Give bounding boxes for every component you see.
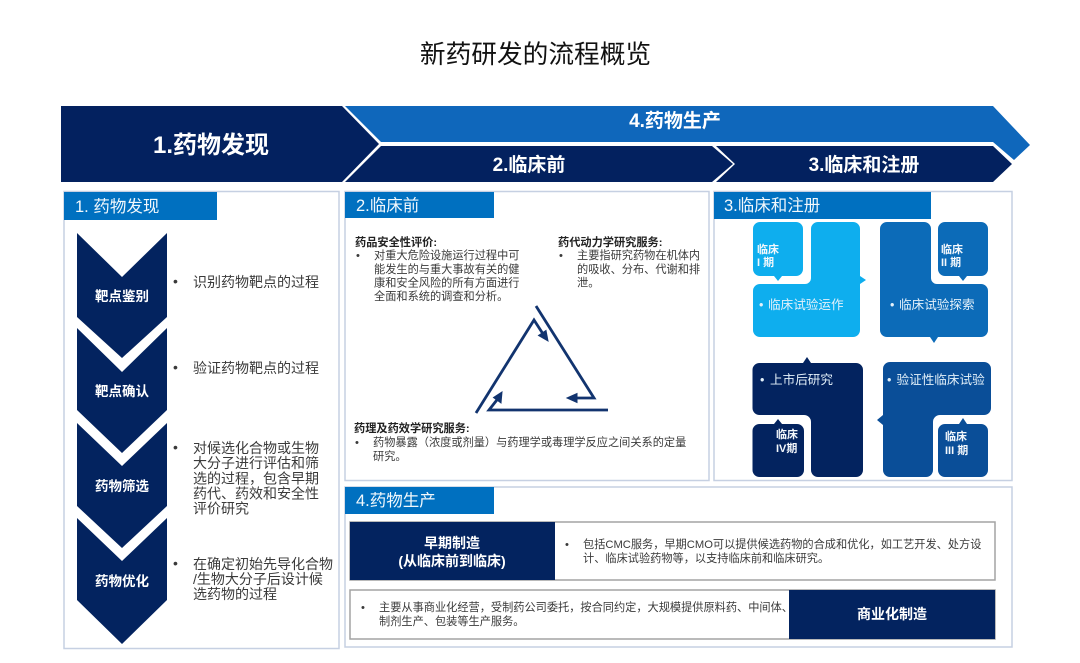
panel: 临床前 bbox=[345, 192, 709, 480]
text: 药品安全性评价: 药品安全性评价: bbox=[355, 235, 437, 249]
banner: process chevrons bbox=[61, 106, 1030, 182]
step: 靶点鉴别: 识别药物靶点的过程 bbox=[193, 274, 319, 290]
chevron: 3.临床和注册 bbox=[716, 146, 1012, 182]
panel heading bbox=[345, 487, 494, 514]
chevron: 4.药物生产 bbox=[345, 106, 1030, 160]
text: 药品安全性评价: 全面和系统的调查和分析。 bbox=[374, 289, 508, 303]
row: 早期制造 bbox=[350, 522, 995, 580]
step: 靶点确认: • bbox=[173, 359, 178, 375]
step: 靶点鉴别: 靶点鉴别 bbox=[95, 288, 149, 304]
block: 上市后研究: 临床 bbox=[776, 427, 798, 441]
step: 药物筛选: 对候选化合物或生物 bbox=[193, 440, 319, 456]
block: 临床试验探索: II 期 bbox=[941, 255, 961, 269]
panel heading: 4.药物生产 bbox=[356, 491, 436, 510]
step: 药物筛选: • bbox=[173, 439, 178, 455]
text: 药代动力学研究服务: 泄。 bbox=[577, 276, 599, 290]
panel heading: 2.临床前 bbox=[356, 196, 419, 215]
text: 药品安全性评价 bbox=[355, 235, 519, 303]
block: 临床试验探索: 临床 bbox=[941, 242, 963, 256]
block: 验证性临床试验: 验证性临床试验 bbox=[896, 372, 985, 387]
block: 临床试验运作: I 期 bbox=[757, 255, 774, 269]
panel heading: 1. 药物发现 bbox=[75, 197, 159, 216]
step: 靶点确认: 验证药物靶点的过程 bbox=[193, 360, 319, 376]
block: 临床试验探索: • bbox=[890, 298, 894, 312]
step: 药物优化 bbox=[77, 518, 333, 644]
step: 药物优化: • bbox=[173, 555, 178, 571]
panel heading: 3.临床和注册 bbox=[724, 196, 820, 215]
block: 临床试验运作 bbox=[753, 222, 866, 337]
panel heading bbox=[714, 192, 931, 219]
step: 药物优化: 药物优化 bbox=[95, 573, 149, 589]
block: 临床试验运作: • bbox=[759, 298, 763, 312]
block: 上市后研究: IV期 bbox=[776, 441, 797, 455]
block: 上市后研究 bbox=[752, 357, 863, 477]
text: 药理及药效学研究服务: 药物暴露（浓度或剂量）与药理学或毒理学反应之间关系的定量 bbox=[373, 435, 686, 449]
block: 上市后研究: • bbox=[760, 373, 764, 387]
block: 临床试验探索 bbox=[880, 222, 988, 343]
text: 药代动力学研究服务: 药代动力学研究服务: bbox=[558, 235, 662, 249]
block: 验证性临床试验 bbox=[877, 362, 991, 477]
title: 新药研发的流程概览 bbox=[420, 40, 651, 69]
text: 药品安全性评价: 康和安全风险的所有方面进行 bbox=[374, 276, 519, 290]
panel: 药物发现 bbox=[64, 192, 339, 648]
row: 商业化制造 bbox=[350, 590, 995, 639]
text: 药理及药效学研究服务: • bbox=[355, 437, 359, 449]
text: 药品安全性评价: • bbox=[356, 250, 360, 262]
chevron: 2.临床前: 2.临床前 bbox=[493, 153, 565, 176]
step: 药物筛选: 评价研究 bbox=[193, 500, 249, 516]
block: 临床试验运作: 临床 bbox=[757, 242, 779, 256]
step: 药物筛选 bbox=[77, 423, 319, 548]
block: 验证性临床试验: III 期 bbox=[945, 443, 968, 457]
block: 临床试验运作: 临床试验运作 bbox=[768, 297, 844, 312]
row: 商业化制造: 商业化制造 bbox=[857, 606, 927, 622]
step: 药物筛选: 选的过程，包含早期 bbox=[193, 470, 319, 486]
text: 药理及药效学研究服务: 药理及药效学研究服务: bbox=[354, 421, 470, 435]
text: 药理及药效学研究服务 bbox=[354, 421, 686, 463]
step: 靶点鉴别 bbox=[77, 233, 319, 358]
panel heading bbox=[345, 192, 494, 218]
step: 靶点鉴别: • bbox=[173, 273, 178, 289]
block: 验证性临床试验: 临床 bbox=[945, 429, 967, 443]
step: 药物优化: 选药物的过程 bbox=[193, 586, 277, 602]
text: 药品安全性评价: 对重大危险设施运行过程中可 bbox=[374, 248, 519, 262]
panel: 临床和注册 bbox=[714, 192, 1012, 480]
row: 早期制造: 包括CMC服务，早期CMO可以提供候选药物的合成和优化，如工艺开发、处方设 bbox=[583, 537, 981, 551]
block: 临床试验探索: 临床试验探索 bbox=[899, 297, 975, 312]
step: 靶点确认: 靶点确认 bbox=[95, 383, 149, 399]
diagram: triangle cycle arrows bbox=[476, 306, 608, 413]
text: 药代动力学研究服务 bbox=[558, 235, 700, 290]
row: 早期制造: 早期制造 bbox=[424, 535, 480, 551]
chevron: 4.药物生产: 4.药物生产 bbox=[629, 109, 721, 132]
row: 商业化制造: • bbox=[361, 602, 365, 614]
step: 药物优化: 在确定初始先导化合物 bbox=[193, 556, 333, 572]
text: 药代动力学研究服务: 的吸收、分布、代谢和排 bbox=[577, 262, 700, 276]
chevron: 2.临床前 bbox=[345, 146, 733, 182]
panel: 药物生产 bbox=[345, 487, 1012, 647]
block: 上市后研究: 上市后研究 bbox=[770, 372, 833, 387]
chevron: 1.药物发现: 1.药物发现 bbox=[153, 132, 269, 159]
row: 商业化制造: 制剂生产、包装等生产服务。 bbox=[379, 614, 524, 628]
panel heading bbox=[64, 192, 217, 220]
row: 早期制造: (从临床前到临床) bbox=[398, 553, 506, 569]
step: 靶点确认 bbox=[77, 328, 319, 453]
step: 药物筛选: 药物筛选 bbox=[95, 478, 149, 494]
row: 早期制造: 计、临床试验药物等，以支持临床前和临床研究。 bbox=[583, 551, 829, 565]
row: 早期制造: • bbox=[565, 539, 569, 551]
chevron: 3.临床和注册: 3.临床和注册 bbox=[809, 153, 919, 176]
text: 药代动力学研究服务: • bbox=[559, 250, 563, 262]
text: 药品安全性评价: 能发生的与重大事故有关的健 bbox=[374, 262, 519, 276]
step: 药物筛选: 药代、药效和安全性 bbox=[193, 486, 319, 502]
text: 药代动力学研究服务: 主要指研究药物在机体内 bbox=[577, 248, 700, 262]
row: 商业化制造: 主要从事商业化经营，受制药公司委托，按合同约定，大规模提供原料药、中间体、 bbox=[379, 600, 793, 614]
chevron: 1.药物发现 bbox=[61, 106, 379, 182]
text: 药理及药效学研究服务: 研究。 bbox=[373, 449, 407, 463]
step: 药物优化: /生物大分子后设计候 bbox=[193, 571, 323, 587]
block: 验证性临床试验: • bbox=[887, 373, 891, 387]
step: 药物筛选: 大分子进行评估和筛 bbox=[193, 455, 319, 471]
